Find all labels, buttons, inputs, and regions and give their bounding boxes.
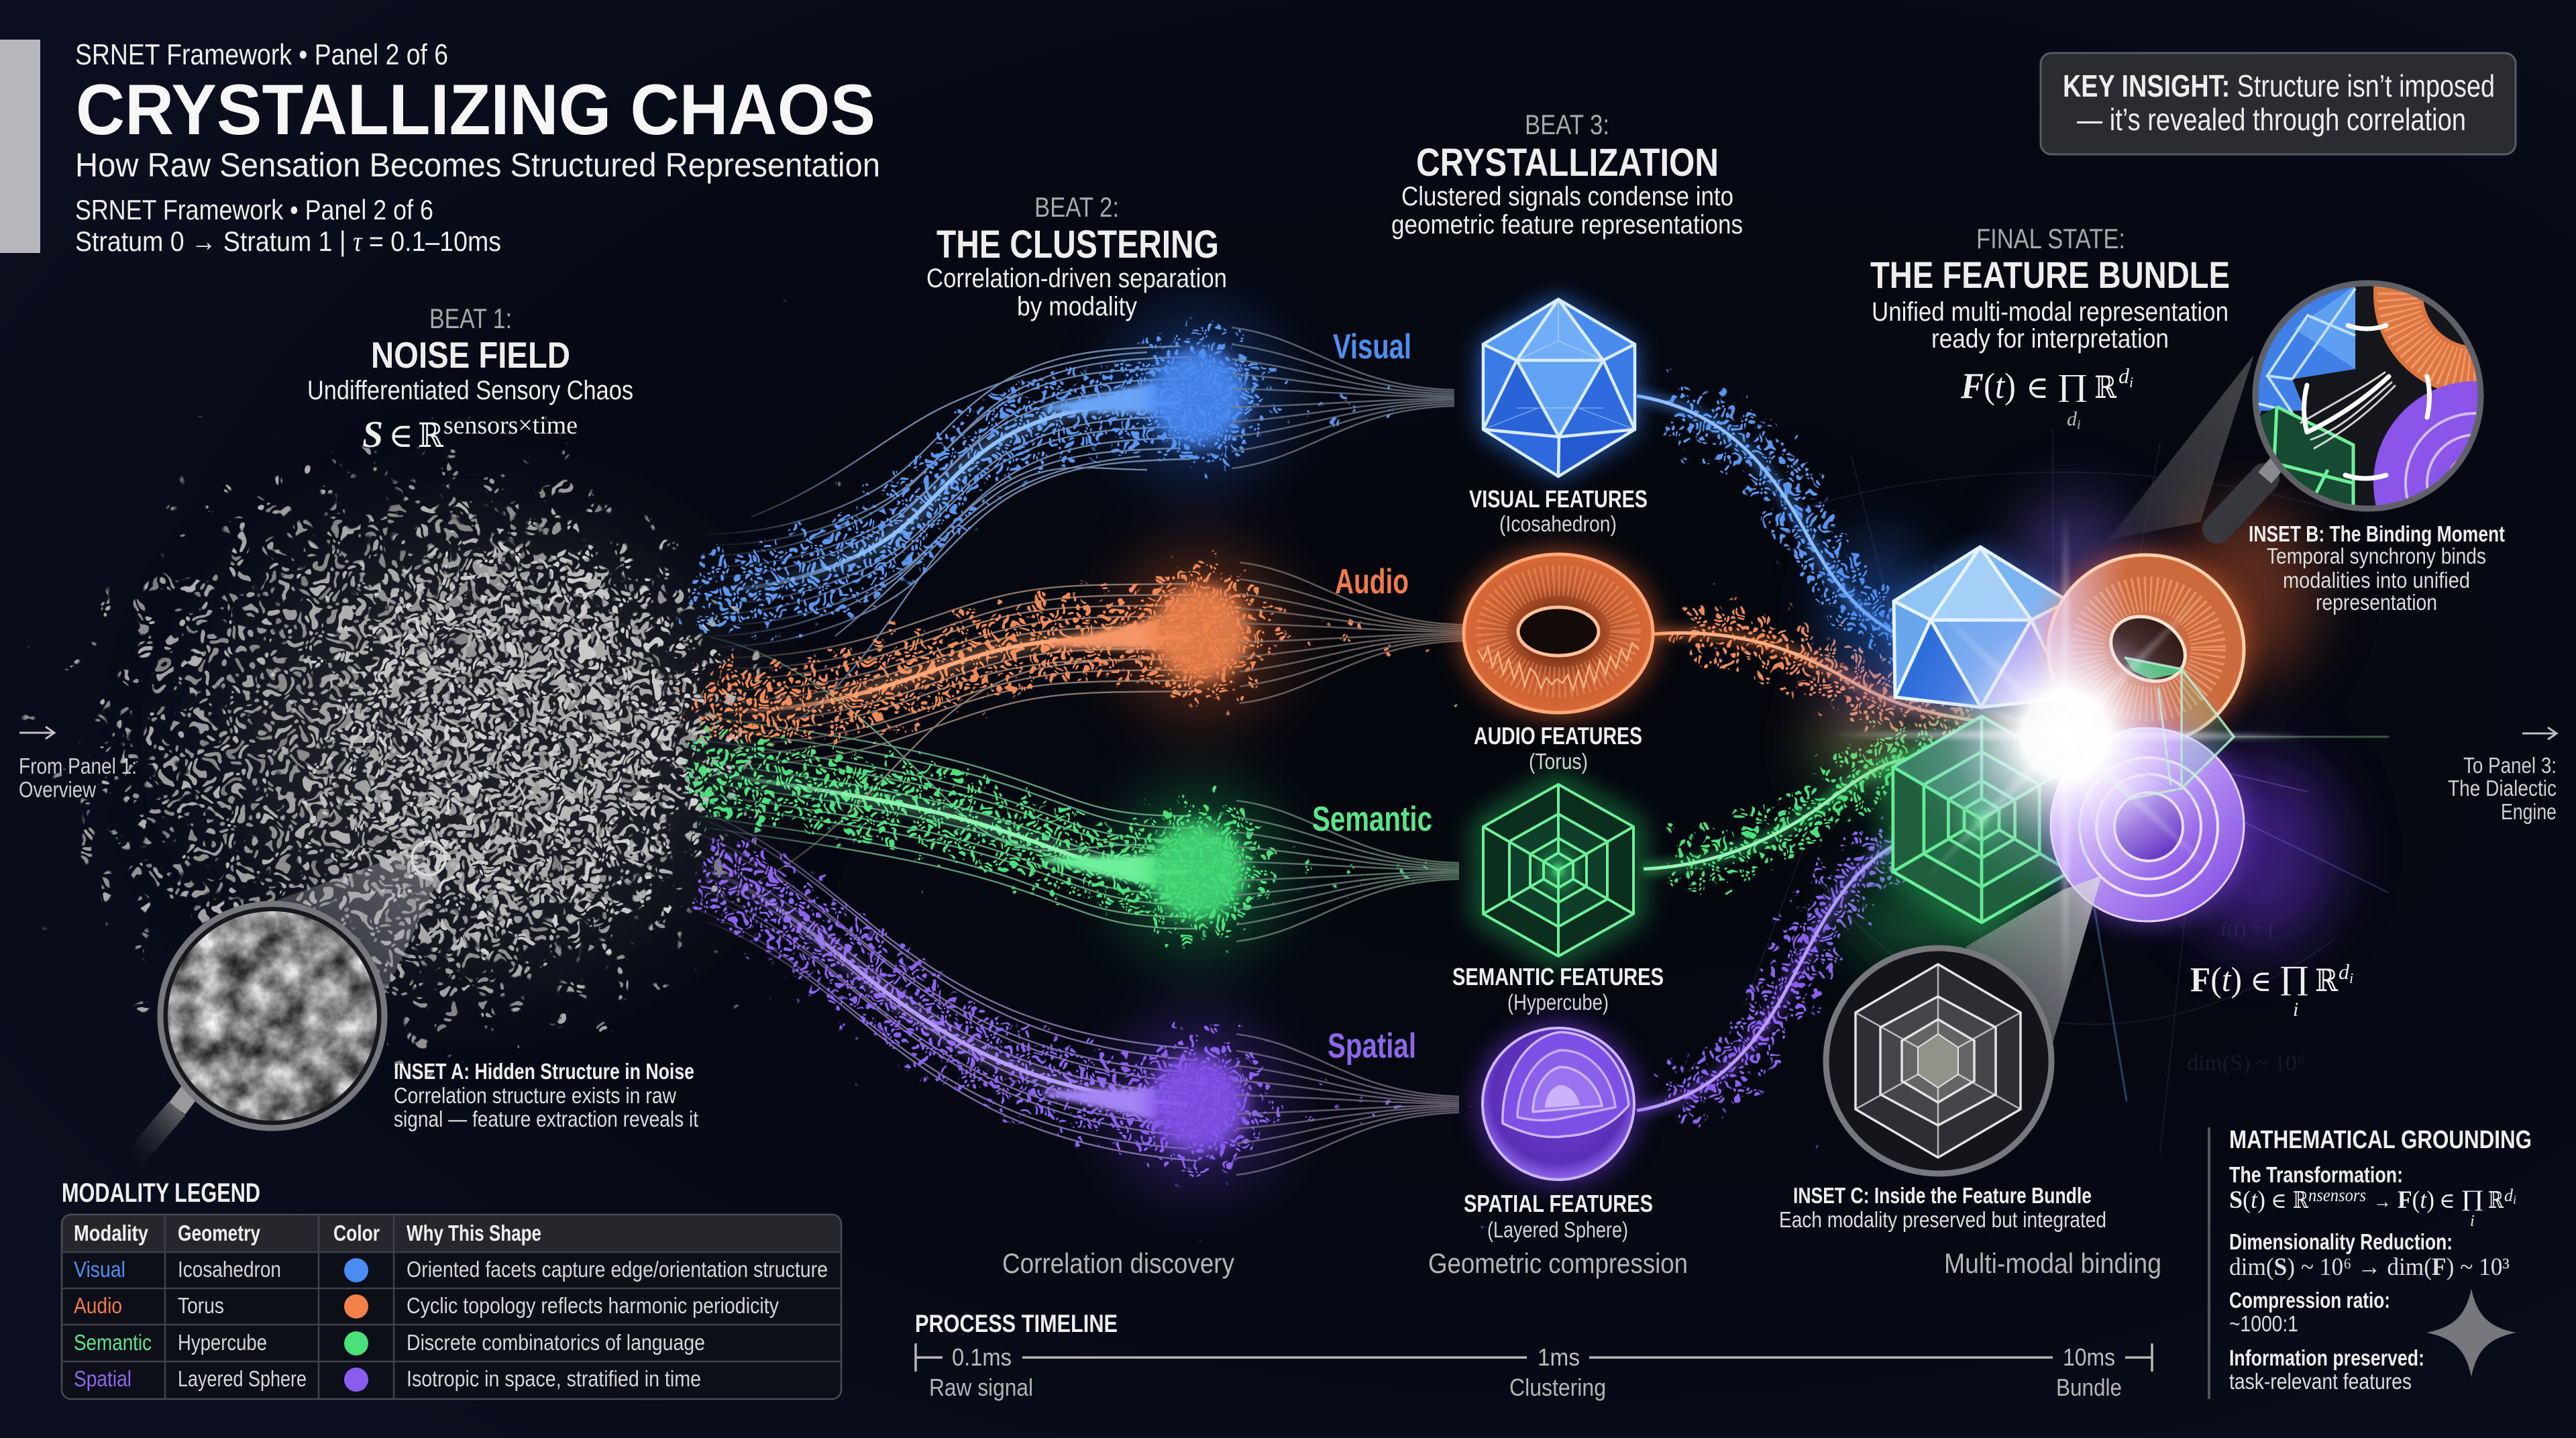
row: spatial: Spatial	[74, 1366, 131, 1391]
icon: audio torus: AUDIO FEATURES	[1474, 722, 1642, 750]
bundle icosahedron	[1894, 547, 2068, 711]
caption: INSET C: Inside the Feature Bundle	[1793, 1183, 2092, 1208]
caption	[1779, 1183, 2106, 1232]
formula S: S	[362, 414, 383, 456]
timeline axis	[916, 1343, 2152, 1372]
process timeline: 0.1ms	[952, 1343, 1012, 1371]
cone: inset C zoom beam	[1966, 876, 2102, 1043]
icon: spatial layered sphere: (Layered Sphere)	[1487, 1217, 1628, 1242]
formula S: ∈	[388, 417, 413, 454]
beat 3 heading: BEAT 3:	[1525, 109, 1609, 140]
transformation formula: nsensors	[2308, 1185, 2366, 1205]
beat 2 heading: by modality	[1017, 292, 1137, 321]
transformation formula: F(t)	[2398, 1186, 2434, 1214]
mathematical grounding: The Transformation:	[2229, 1162, 2403, 1187]
caption: Temporal synchrony binds	[2267, 544, 2486, 568]
left nav: from panel 1	[19, 727, 137, 802]
icon: spatial layered sphere	[1464, 1025, 1653, 1242]
lens	[1826, 948, 2051, 1174]
out-stream: visual	[1637, 396, 1925, 648]
transformation formula: ℝ	[2488, 1188, 2504, 1213]
faint mathematical wireframe behind the bundle: f(t) = ∫	[2220, 919, 2274, 942]
brighter core specks	[78, 474, 923, 1088]
title block: SRNET Framework • Panel 2 of 6	[75, 38, 448, 71]
main strand and cluster core: audio	[724, 584, 1250, 711]
row: audio	[74, 1293, 779, 1319]
row: semantic: Semantic	[74, 1330, 152, 1355]
inset B: the binding moment	[2217, 217, 2576, 615]
nested hypercube wireframe	[1856, 964, 2021, 1158]
header row: Modality	[74, 1221, 149, 1245]
formula F: d	[2118, 364, 2129, 388]
formula F: i	[2129, 374, 2133, 391]
row: visual: Oriented facets capture edge/orientation structure	[407, 1257, 828, 1282]
left nav: from panel 1: Overview	[19, 777, 96, 802]
mathematical grounding	[2208, 1126, 2532, 1399]
row: audio: Torus	[178, 1293, 224, 1318]
panel: noise field	[0, 416, 939, 1100]
binding burst	[1904, 574, 2226, 896]
faint mathematical wireframe behind the bundle	[1744, 429, 2334, 1154]
title block: SRNET Framework • Panel 2 of 6	[75, 194, 433, 225]
fine strands: spatial	[698, 809, 1197, 1161]
main strand and cluster core: visual	[704, 348, 1247, 590]
second formula: ∈	[2250, 965, 2272, 998]
row: audio: Audio	[74, 1293, 122, 1318]
bundle wire overlay	[2086, 658, 2234, 799]
lens flare rays	[1831, 510, 2308, 1007]
mathematical grounding: Dimensionality Reduction:	[2229, 1229, 2453, 1254]
gray haze under noise	[228, 530, 738, 960]
header row: Geometry	[178, 1221, 261, 1245]
header row: Color	[333, 1221, 380, 1245]
cone: inset B zoom beam	[2108, 355, 2254, 540]
transformation formula: ∈	[2439, 1188, 2455, 1213]
beat 2 heading: Correlation-driven separation	[926, 264, 1227, 293]
title block: CRYSTALLIZING CHAOS	[76, 69, 875, 150]
ambient cluster glows	[1110, 310, 1288, 1192]
magnifier lens with cloudy noise	[160, 904, 384, 1128]
mathematical grounding: dim(S) ~ 10⁶ → dim(F) ~ 10³	[2229, 1253, 2510, 1281]
transformation formula: ∈	[2271, 1188, 2287, 1213]
mathematical grounding: Compression ratio:	[2229, 1288, 2390, 1313]
row: audio: Cyclic topology reflects harmonic periodicity	[407, 1293, 779, 1318]
formula S	[362, 411, 578, 456]
beat 2 heading	[926, 191, 1227, 321]
second formula	[2190, 959, 2353, 1021]
transformation formula: S(t)	[2229, 1186, 2265, 1214]
row: semantic: Hypercube	[178, 1330, 267, 1355]
bundle layered sphere	[2047, 725, 2247, 925]
row: spatial: Isotropic in space, stratified in time	[407, 1366, 701, 1391]
icon: spatial layered sphere: SPATIAL FEATURES	[1464, 1190, 1653, 1217]
icon: visual icosahedron: (Icosahedron)	[1499, 511, 1617, 536]
process timeline: 10ms	[2063, 1343, 2115, 1371]
row: visual: Icosahedron	[178, 1257, 281, 1282]
beat 1 heading: Undifferentiated Sensory Chaos	[307, 376, 633, 405]
process timeline: PROCESS TIMELINE	[915, 1310, 1118, 1337]
cluster and stream speckle: semantic	[644, 671, 2019, 993]
modality stream labels: Audio	[1335, 562, 1409, 601]
magnifier handle	[133, 1092, 189, 1160]
faint mathematical wireframe behind the bundle: F(t)	[1932, 561, 1966, 586]
icon: four-point star	[2426, 1288, 2516, 1377]
transformation formula: i	[2470, 1213, 2475, 1230]
right nav: to panel 3: Engine	[2501, 799, 2557, 824]
row: spatial: Layered Sphere	[178, 1366, 307, 1391]
title block: How Raw Sensation Becomes Structured Representation	[75, 146, 880, 184]
magnifier handle	[2217, 478, 2265, 529]
fine strands: audio	[724, 584, 1197, 765]
cluster and stream speckle: audio	[644, 523, 2019, 805]
modality legend	[62, 1178, 841, 1399]
table frame	[62, 1215, 841, 1399]
row: visual	[74, 1257, 828, 1282]
stage captions	[1002, 1247, 2161, 1279]
beat 3 heading	[1391, 109, 1743, 240]
row: semantic: Discrete combinatorics of language	[407, 1330, 705, 1355]
bundle hypercube	[1892, 716, 2070, 923]
header row: Why This Shape	[407, 1221, 541, 1245]
header row	[74, 1221, 541, 1245]
broad gray specks	[20, 416, 875, 1082]
final state heading: FINAL STATE:	[1976, 223, 2125, 254]
beat 3 heading: CRYSTALLIZATION	[1416, 141, 1719, 185]
beat 3 heading: Clustered signals condense into	[1401, 182, 1733, 211]
caption: signal — feature extraction reveals it	[394, 1107, 698, 1131]
transformation formula: ℝ	[2293, 1188, 2309, 1213]
faint mathematical wireframe behind the bundle: dim(S) ~ 10⁶	[2187, 1051, 2305, 1076]
caption: representation	[2316, 590, 2437, 615]
out-stream: semantic	[1644, 752, 1986, 869]
stage captions: Geometric compression	[1428, 1247, 1688, 1279]
title block: Stratum 0 → Stratum 1 | τ = 0.1–10ms	[75, 225, 501, 258]
mathematical grounding: ~1000:1	[2229, 1311, 2298, 1336]
feature bundle	[1811, 497, 2388, 1100]
process timeline	[915, 1310, 2152, 1401]
row: visual: Visual	[74, 1257, 125, 1282]
key insight callout: KEY INSIGHT: Structure isn’t imposed	[2063, 68, 2495, 103]
row: semantic	[74, 1330, 705, 1355]
out-stream: audio	[1654, 633, 2012, 723]
beat 2 heading: THE CLUSTERING	[936, 223, 1219, 266]
stage captions: Correlation discovery	[1002, 1247, 1234, 1279]
process timeline: Raw signal	[929, 1374, 1033, 1401]
second formula: d	[2339, 960, 2349, 984]
accent bar	[0, 40, 40, 253]
right nav: to panel 3: The Dialectic	[2448, 776, 2557, 801]
mathematical grounding: Information preserved:	[2229, 1345, 2424, 1370]
long faint rays	[2065, 735, 2388, 1100]
title block	[0, 38, 880, 258]
final state heading	[1870, 223, 2230, 432]
mathematical grounding: task-relevant features	[2229, 1369, 2412, 1394]
icon: semantic hypercube: SEMANTIC FEATURES	[1452, 963, 1664, 990]
inset A: hidden structure in noise	[133, 841, 698, 1160]
lens contents	[2254, 217, 2576, 585]
formula F	[1960, 364, 2133, 432]
stage captions: Multi-modal binding	[1944, 1247, 2161, 1279]
transformation formula	[2229, 1185, 2516, 1230]
icon: visual icosahedron: VISUAL FEATURES	[1469, 485, 1648, 513]
process timeline: 1ms	[1538, 1343, 1580, 1371]
out-stream: spatial	[1637, 832, 1919, 1111]
formula F: i	[2077, 417, 2081, 432]
beat 1 heading: NOISE FIELD	[371, 334, 570, 376]
beat 1 heading	[307, 303, 633, 456]
formula F: ∏	[2057, 368, 2088, 402]
formula F: F(t)	[1960, 366, 2016, 406]
icon: visual icosahedron	[1469, 299, 1648, 536]
caption: INSET A: Hidden Structure in Noise	[394, 1059, 694, 1084]
final state heading: ready for interpretation	[1931, 324, 2169, 354]
key insight callout: — it’s revealed through correlation	[2077, 102, 2466, 137]
transformation formula: d	[2504, 1186, 2513, 1205]
formula S: sensors×time	[443, 411, 578, 440]
fine strands: semantic	[698, 637, 1197, 929]
fine strands: visual	[704, 346, 1191, 725]
bundle ambient glows	[1811, 497, 2334, 966]
formula F: ∈	[2026, 370, 2049, 405]
zoom cone	[272, 850, 439, 996]
final state heading: THE FEATURE BUNDLE	[1870, 254, 2230, 296]
key insight callout	[2041, 53, 2516, 154]
icon: audio torus	[1461, 552, 1656, 774]
left nav: from panel 1: From Panel 1:	[19, 754, 137, 778]
caption	[394, 1059, 698, 1131]
sampling ring	[412, 841, 445, 875]
caption	[2249, 521, 2505, 615]
bundle torus	[2045, 552, 2247, 747]
right nav: to panel 3	[2448, 727, 2557, 824]
second formula: ∏	[2279, 959, 2310, 996]
transformation formula: i	[2513, 1193, 2516, 1206]
beat 1 heading: BEAT 1:	[429, 303, 512, 334]
beat 3 heading: geometric feature representations	[1391, 210, 1743, 240]
icon: semantic hypercube	[1452, 784, 1664, 1015]
formula F: d	[2067, 408, 2077, 430]
cross strand: orange rising from lower field	[711, 658, 1154, 899]
cluster and stream speckle: spatial	[644, 772, 2019, 1241]
lens ring	[2255, 283, 2481, 509]
transformation formula: →	[2373, 1190, 2392, 1213]
beat 2 heading: BEAT 2:	[1034, 191, 1119, 223]
transformation formula: ∏	[2461, 1186, 2484, 1211]
icon: semantic hypercube: (Hypercube)	[1507, 990, 1609, 1015]
caption: modalities into unified	[2283, 568, 2470, 593]
process timeline: Clustering	[1509, 1374, 1606, 1401]
main strand and cluster core: semantic	[698, 772, 1247, 921]
main strand and cluster core: spatial	[698, 866, 1247, 1154]
icon: audio torus: (Torus)	[1529, 749, 1588, 774]
data streams: noise field into clusters and out to bundle	[644, 255, 2019, 1241]
caption: Each modality preserved but integrated	[1779, 1207, 2106, 1232]
formula F: ℝ	[2094, 370, 2117, 405]
row: spatial	[74, 1366, 701, 1392]
modality legend: MODALITY LEGEND	[62, 1178, 260, 1208]
caption: Correlation structure exists in raw	[394, 1083, 676, 1108]
process timeline: Bundle	[2056, 1374, 2122, 1401]
right nav: to panel 3: To Panel 3:	[2463, 753, 2557, 778]
modality stream labels	[1312, 327, 1432, 1066]
caption: INSET B: The Binding Moment	[2249, 521, 2505, 546]
inset C: inside the feature bundle	[1779, 948, 2106, 1232]
modality stream labels: Semantic	[1312, 800, 1432, 839]
second formula: ℝ	[2315, 964, 2339, 998]
final state heading: Unified multi-modal representation	[1872, 297, 2229, 327]
formula S: ℝ	[418, 417, 443, 454]
cluster and stream speckle: visual	[644, 255, 2019, 792]
second formula: i	[2293, 998, 2298, 1021]
modality stream labels: Visual	[1333, 327, 1411, 366]
thin fans from clusters to geometry	[1232, 327, 1454, 468]
modality stream labels: Spatial	[1328, 1027, 1416, 1066]
second formula: F(t)	[2190, 961, 2242, 999]
second formula: i	[2349, 970, 2353, 986]
